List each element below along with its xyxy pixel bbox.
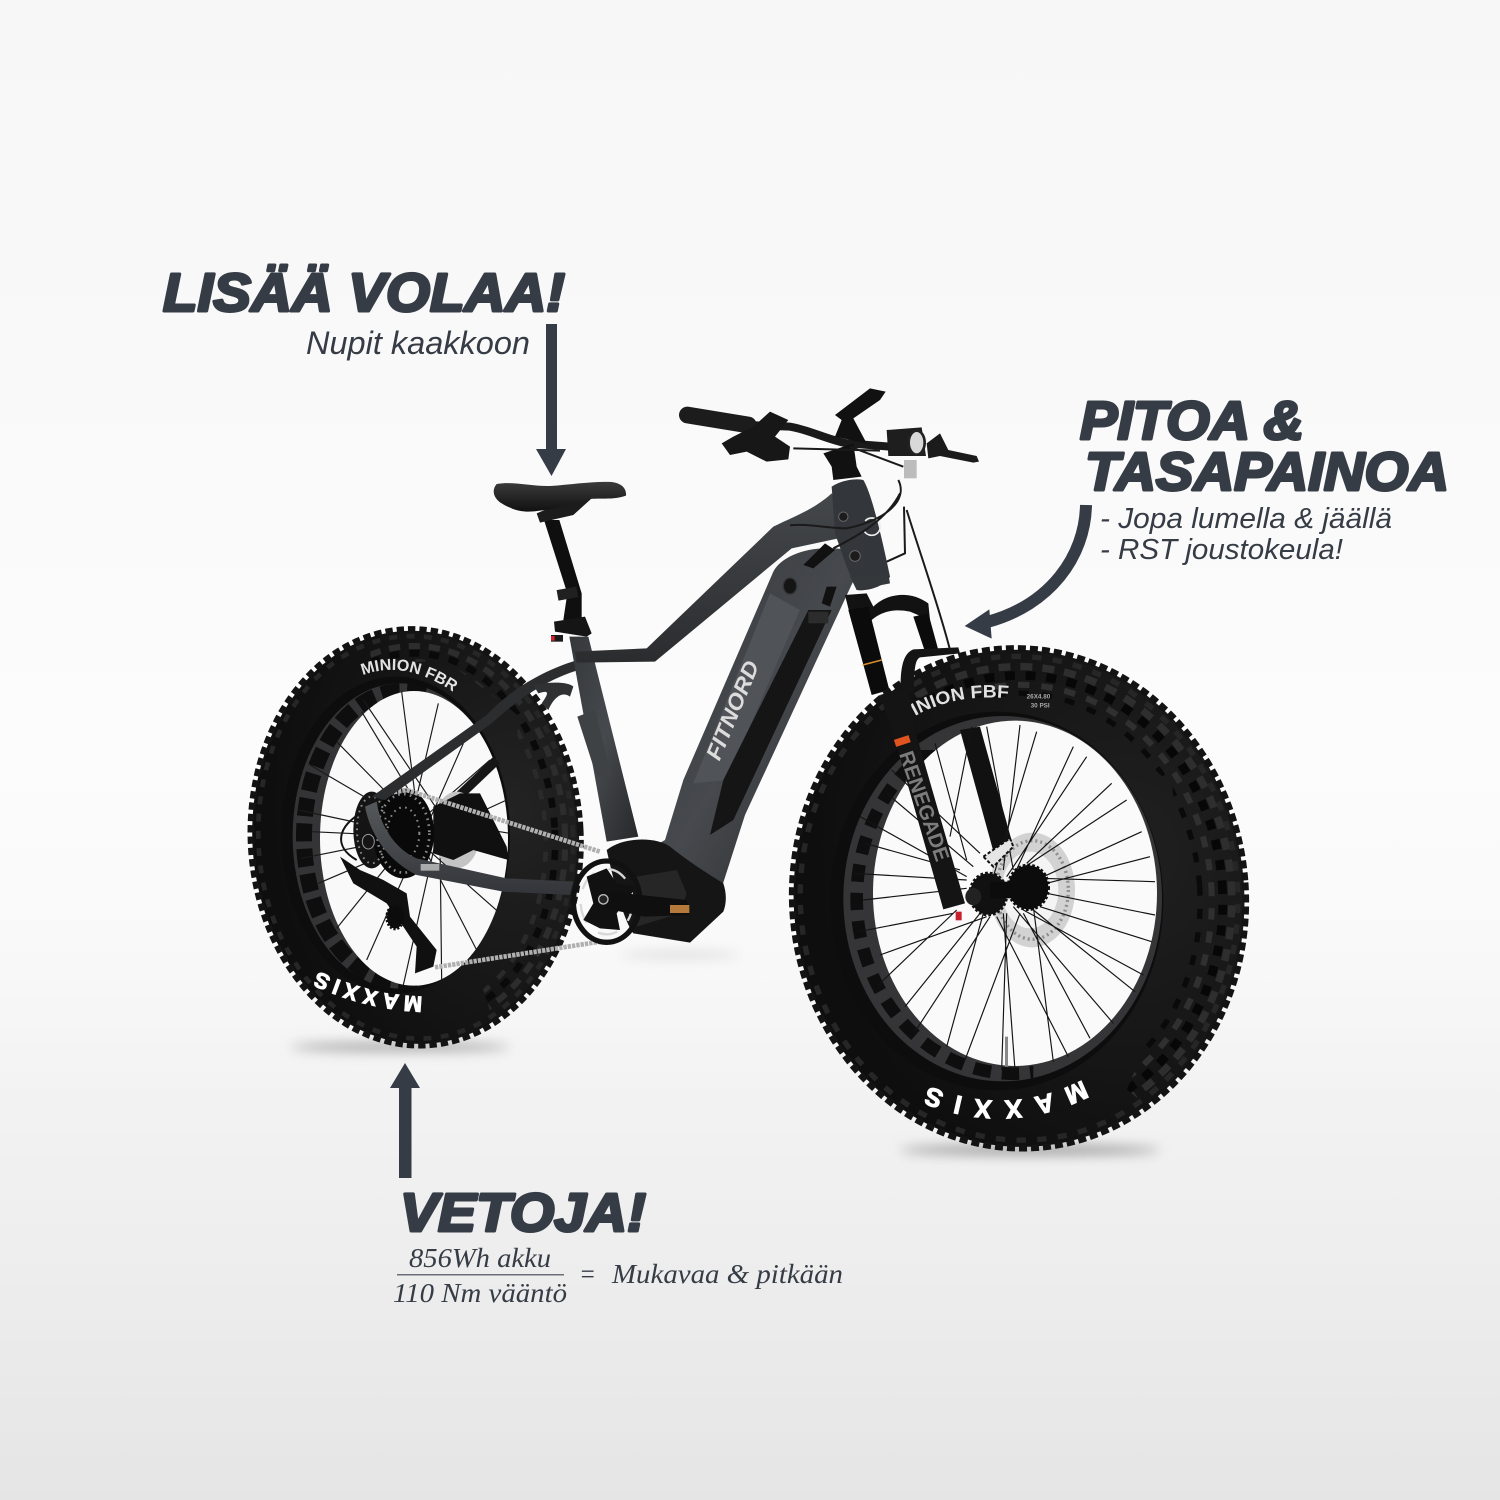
handlebar [747, 425, 890, 447]
rear brake and hub mass [433, 793, 508, 860]
jockey wheel [387, 906, 403, 929]
cassette [373, 788, 434, 878]
red light [551, 635, 563, 642]
caliper [983, 838, 1013, 867]
rear rim [281, 677, 510, 993]
left stanchion [848, 607, 889, 695]
bullet text 1: - Jopa lumella & jäällä [1100, 503, 1392, 535]
bike frame [569, 479, 890, 887]
tyre pressure marking: 30 PSI [1031, 703, 1050, 710]
headlight body [887, 427, 926, 456]
chainring [573, 861, 640, 942]
grip [687, 415, 748, 425]
fork right leg [960, 727, 1013, 863]
result text: Mukavaa & pitkään [611, 1259, 843, 1289]
stem [823, 443, 862, 480]
orange fork badge [894, 735, 911, 747]
head tube bolts [839, 512, 860, 561]
seat clamp [554, 617, 592, 637]
fraction denominator: 110 Nm vääntö [393, 1278, 567, 1308]
charging port cap [783, 578, 797, 594]
motor housing [607, 840, 726, 943]
chainstay label [421, 864, 439, 871]
front tyre lettering MINION: INION FBF [911, 685, 1009, 716]
right lever [927, 433, 979, 463]
down tube highlight [693, 593, 800, 783]
battery lock [822, 587, 837, 607]
callout: PITOA & TASAPAINOA [965, 391, 1449, 639]
dropper seatpost [544, 520, 582, 620]
handlebar cockpit [687, 388, 979, 650]
head tube [832, 479, 890, 590]
heading: VETOJA! [400, 1183, 646, 1243]
down tube [653, 548, 860, 887]
heading line 1: PITOA & [1080, 391, 1304, 451]
frame port [803, 543, 835, 568]
illustration: fat-tyre e-bike [248, 388, 1250, 1152]
battery [710, 610, 832, 835]
seat and post [494, 482, 626, 642]
battery label [808, 612, 828, 623]
head tube badge [863, 518, 880, 535]
arrow: curved to front fork [965, 505, 1086, 639]
front fork lower leg [880, 647, 965, 920]
front spokes [853, 725, 1155, 1070]
front tyre [788, 645, 1250, 1152]
rear tyre [248, 626, 584, 1048]
hub right flange [1008, 865, 1048, 909]
chainring spider [583, 868, 637, 930]
floor shadows under wheels [290, 952, 1160, 1155]
saddle rails [537, 497, 592, 523]
orange ring [863, 660, 882, 665]
red axle lever [956, 912, 962, 920]
fork leg [880, 687, 965, 909]
outer cog plate [353, 792, 390, 868]
hub left flange [970, 873, 1007, 915]
rear spokes [298, 692, 510, 985]
rear wheel [248, 626, 584, 1048]
callout: VETOJA [390, 1063, 843, 1308]
lower chainstay [365, 802, 573, 895]
tyre size marking: 26X4.80 [1027, 693, 1051, 700]
red light lens [551, 636, 555, 641]
rear drivetrain [340, 658, 600, 973]
arrow: down to saddle [536, 324, 566, 476]
hub core [990, 882, 1027, 898]
saddle [494, 482, 626, 512]
equals sign: = [579, 1259, 596, 1289]
headlight lens [909, 431, 925, 455]
post collar [557, 587, 578, 601]
heading: LISÄÄ VOLAA! [163, 263, 565, 323]
pedal reflector [670, 905, 689, 913]
stay bridge [533, 683, 573, 710]
front tyre lettering MAXXIS: MAXXIS [924, 1080, 1089, 1120]
display bracket [835, 388, 886, 443]
upper chain [377, 790, 600, 852]
seat tube plate [577, 710, 612, 777]
seat tube [569, 637, 638, 842]
rear axle [362, 834, 374, 849]
cassette teeth [357, 794, 429, 873]
motor and crank [573, 840, 726, 943]
arrow: up to rear tyre [390, 1063, 420, 1178]
crank bolt [599, 895, 608, 904]
rear tyre lettering MAXXIS: MAXXIS [314, 972, 422, 1012]
motor cover [637, 870, 687, 927]
frame brand FITNORD: FITNORD [701, 657, 764, 764]
rear disc rotor [433, 792, 481, 868]
fork crown [845, 593, 930, 622]
fork upper [845, 573, 938, 695]
fork decal: RENEGADE [894, 748, 953, 864]
front rim [830, 712, 1170, 1090]
fraction bar [397, 1274, 564, 1276]
valve [1005, 1037, 1008, 1067]
left brake lever and shifter [722, 412, 790, 462]
rear derailleur [340, 857, 437, 973]
subtext: Nupit kaakkoon [306, 325, 530, 361]
crank arm [600, 892, 690, 917]
front wheel [788, 645, 1250, 1152]
right stanchion [913, 613, 938, 652]
upper seatstay [372, 658, 585, 800]
axle end [965, 888, 981, 905]
far seat stay [460, 760, 497, 795]
callout: LISÄÄ VOLAA [163, 263, 566, 476]
brake cables [790, 447, 950, 650]
front reflector [904, 460, 917, 478]
rear tyre lettering MINION: MINION FBR [360, 658, 458, 692]
bullet text 2: - RST joustokeula! [1100, 534, 1343, 566]
front disc rotor [990, 833, 1075, 947]
top tube [575, 493, 857, 663]
head cup [850, 573, 890, 590]
heading line 2: TASAPAINOA [1085, 442, 1449, 502]
derailleur cable loop [341, 812, 363, 860]
fraction numerator: 856Wh akku [409, 1243, 551, 1273]
lower chain [435, 942, 600, 967]
fork arch [901, 647, 960, 693]
